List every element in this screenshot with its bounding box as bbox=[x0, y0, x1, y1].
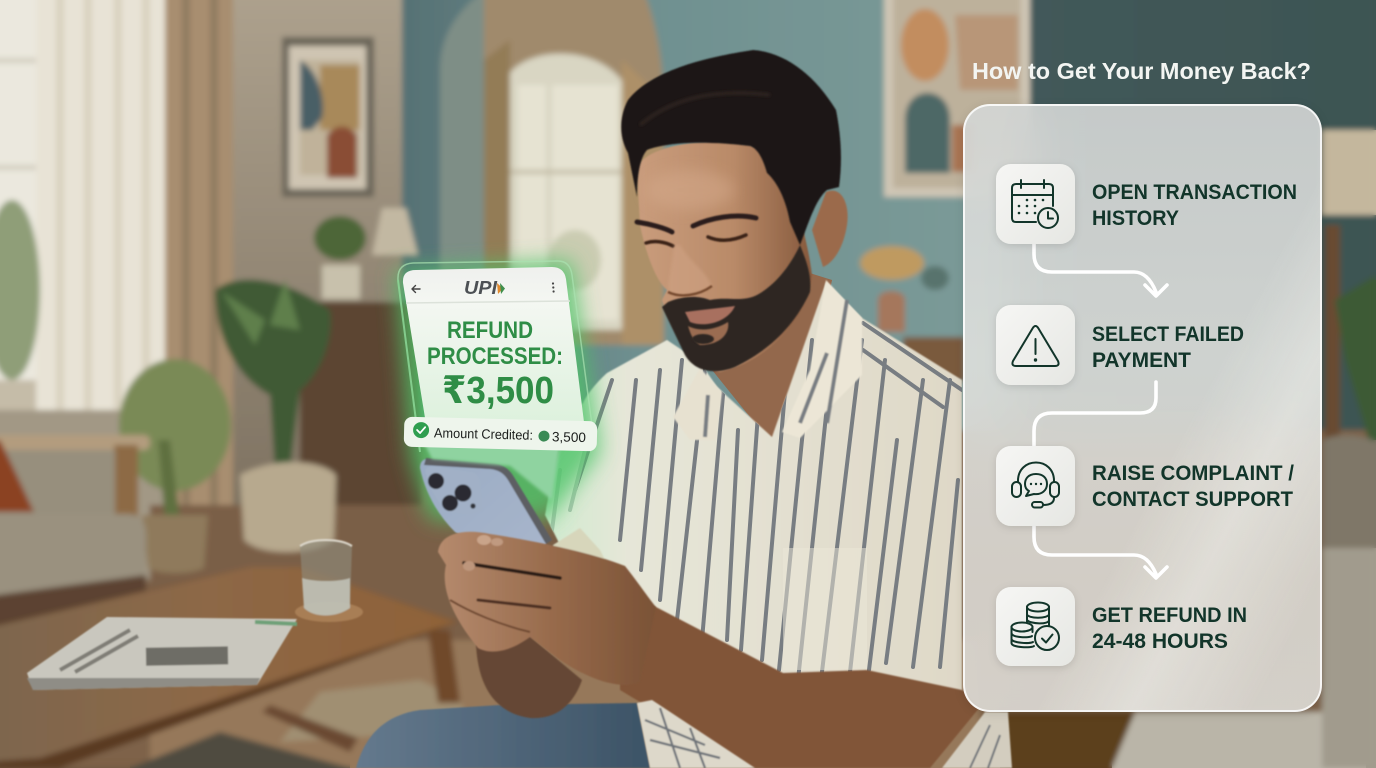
hand holding phone bbox=[438, 528, 656, 685]
magazines under table bbox=[130, 732, 350, 768]
forearm bbox=[620, 600, 980, 768]
step 2 label: SELECT FAILED bbox=[1092, 322, 1244, 346]
rug bbox=[280, 680, 470, 742]
check badge bbox=[413, 422, 429, 438]
phone bbox=[420, 458, 552, 570]
icon tile: coins with check bbox=[996, 587, 1075, 666]
shirt tail bbox=[637, 700, 1012, 768]
side shelf with vase bbox=[903, 337, 965, 382]
card outline glow bbox=[398, 261, 592, 425]
picture left bbox=[282, 37, 374, 197]
icon tile: warning triangle bbox=[996, 305, 1075, 385]
refund headline: REFUND bbox=[447, 317, 533, 344]
step 1 label: OPEN TRANSACTION bbox=[1092, 180, 1297, 204]
step 3 label: RAISE COMPLAINT / bbox=[1092, 461, 1294, 485]
step 4 bbox=[996, 587, 1247, 666]
icon tile: calendar clock bbox=[996, 164, 1075, 244]
panel: how to get your money back bbox=[963, 104, 1322, 712]
UPI logo: UPI bbox=[464, 277, 498, 298]
refund headline bbox=[427, 317, 563, 412]
step 4 label bbox=[1092, 603, 1247, 653]
step 4 label: GET REFUND IN bbox=[1092, 603, 1247, 627]
left sofa bbox=[0, 435, 150, 450]
step 1 label bbox=[1092, 180, 1297, 230]
refund headline: PROCESSED: bbox=[427, 343, 563, 370]
green glow bbox=[396, 260, 600, 520]
chest pocket bbox=[783, 548, 867, 670]
cabinet and lamp behind bbox=[300, 302, 422, 522]
right sofa bbox=[1322, 435, 1376, 560]
amount value: 3,500 bbox=[552, 429, 586, 445]
card lower tint bbox=[425, 445, 560, 500]
lower left wall bbox=[0, 410, 170, 580]
connector arrow 3 bbox=[1034, 526, 1167, 578]
header divider bbox=[406, 301, 570, 303]
step 4 label: 24-48 HOURS bbox=[1092, 629, 1228, 653]
neck bbox=[696, 270, 832, 442]
upper arm of phone hand bbox=[476, 635, 582, 718]
plants bbox=[0, 200, 40, 380]
menu dots bbox=[552, 282, 555, 293]
step 3 label: CONTACT SUPPORT bbox=[1092, 487, 1293, 511]
sleeve fold near thumb bbox=[553, 528, 610, 570]
connector arrow 1 bbox=[1034, 244, 1167, 296]
beard bbox=[662, 245, 810, 371]
amount credited strip bbox=[404, 417, 597, 451]
back arrow bbox=[412, 286, 420, 292]
face bbox=[637, 142, 812, 372]
icon tile: headset support bbox=[996, 446, 1075, 526]
newspaper bbox=[27, 617, 297, 690]
amount text: Amount Credited: bbox=[434, 425, 533, 443]
chin patch bbox=[688, 322, 728, 345]
step 1 bbox=[996, 164, 1297, 244]
water glass bbox=[295, 540, 363, 622]
teal wall bbox=[400, 0, 1376, 430]
eyebrows bbox=[637, 222, 672, 232]
floor bbox=[150, 505, 980, 768]
left window bbox=[0, 0, 44, 410]
card body bbox=[403, 267, 584, 424]
step 2 bbox=[996, 305, 1244, 385]
man bbox=[356, 50, 1012, 768]
forehead highlight bbox=[646, 170, 734, 210]
table legs and shelf bbox=[428, 630, 460, 703]
step 2 label bbox=[1092, 322, 1244, 372]
nose shadow bbox=[668, 245, 712, 295]
refund headline: ₹3,500 bbox=[442, 370, 554, 412]
jeans bbox=[356, 703, 650, 768]
shirt stripes bbox=[552, 323, 962, 690]
shirt body bbox=[545, 282, 962, 700]
arch surround bbox=[440, 0, 484, 345]
refund card bbox=[398, 261, 597, 500]
shirt collar bbox=[673, 280, 862, 440]
step 1 label: HISTORY bbox=[1092, 206, 1179, 230]
title: How to Get Your Money Back? bbox=[972, 58, 1311, 84]
connector 2 bbox=[1034, 382, 1156, 446]
right lamp and plant bbox=[1322, 130, 1376, 215]
hair shine bbox=[640, 93, 770, 125]
step 3 bbox=[996, 446, 1294, 526]
table bbox=[0, 567, 458, 768]
rupee coin bbox=[538, 430, 550, 442]
beige wall bbox=[230, 0, 402, 520]
pots bbox=[240, 462, 336, 552]
picture right bbox=[884, 0, 1030, 197]
ear bbox=[812, 191, 848, 267]
step 2 label: PAYMENT bbox=[1092, 348, 1191, 372]
lips bbox=[685, 306, 735, 324]
phone edge between fingers bbox=[464, 563, 560, 578]
hair bbox=[621, 50, 841, 245]
arch plant bbox=[549, 230, 601, 290]
step 3 label bbox=[1092, 461, 1294, 511]
eyes bbox=[646, 242, 673, 246]
